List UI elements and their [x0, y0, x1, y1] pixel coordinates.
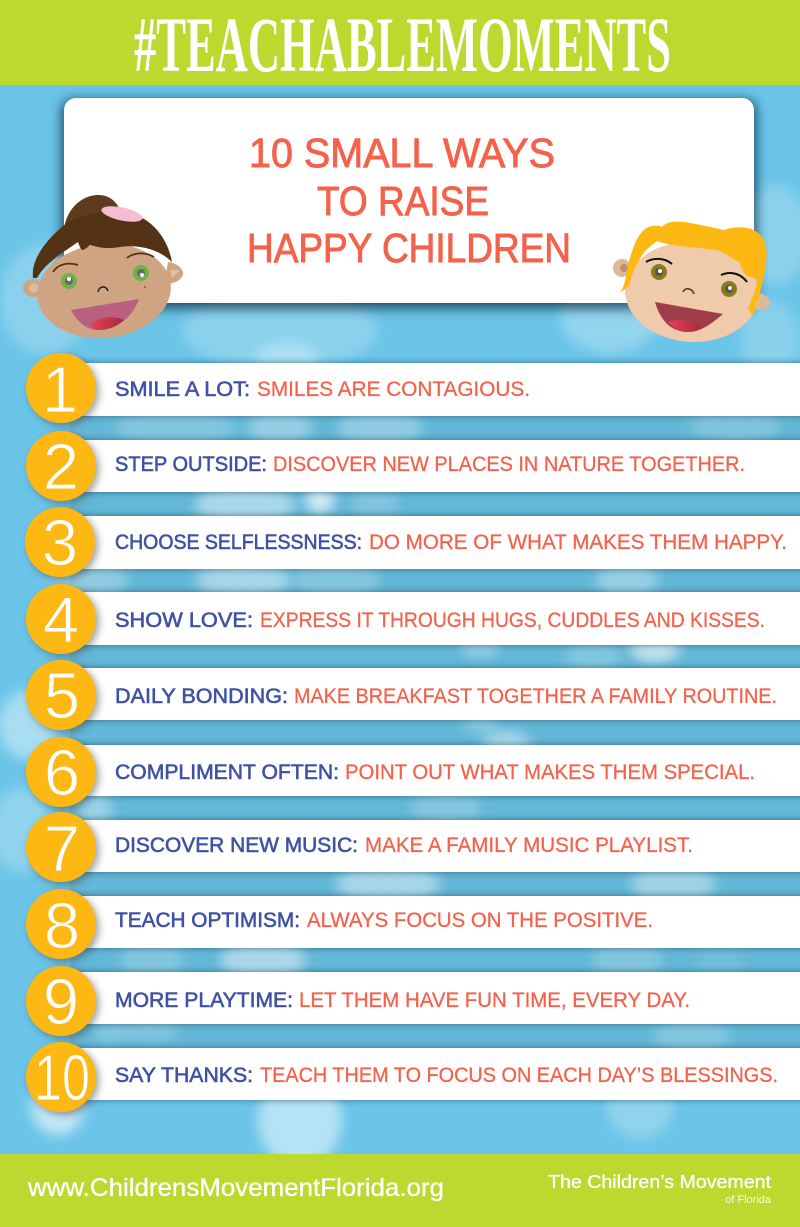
item 4: SHOW LOVE: — [115, 609, 253, 632]
website url: www.ChildrensMovementFlorida.org — [27, 1174, 444, 1202]
item 4: 4 — [43, 583, 79, 656]
icon: boy face — [613, 222, 770, 345]
item 6: 6 — [44, 736, 80, 809]
logo text: of Florida — [725, 1194, 772, 1206]
item 1: SMILES ARE CONTAGIOUS. — [257, 378, 530, 401]
heading: 10 small ways to raise happy children: 10 SMALL WAYS — [249, 130, 555, 176]
item 10: 10 — [34, 1041, 90, 1114]
item 7 — [26, 812, 800, 885]
item 4: EXPRESS IT THROUGH HUGS, CUDDLES AND KISSES. — [260, 609, 765, 632]
item 3: CHOOSE SELFLESSNESS: — [115, 531, 362, 554]
heading: 10 small ways to raise happy children: TO RAISE — [317, 178, 489, 224]
item 9 — [26, 965, 800, 1039]
item 7: 7 — [44, 812, 80, 885]
item 7: DISCOVER NEW MUSIC: — [115, 834, 358, 857]
item 5: 5 — [44, 659, 80, 732]
item 5: DAILY BONDING: — [115, 685, 288, 708]
icon: girl face — [23, 195, 183, 345]
heading: 10 small ways to raise happy children — [247, 130, 571, 271]
item 7: MAKE A FAMILY MUSIC PLAYLIST. — [365, 834, 693, 857]
item 4 — [26, 583, 800, 657]
item 6: POINT OUT WHAT MAKES THEM SPECIAL. — [345, 761, 755, 784]
header band — [0, 0, 800, 88]
logo text — [548, 1172, 772, 1206]
item 2: 2 — [43, 430, 79, 503]
item 10 — [26, 1041, 800, 1115]
list: ten tips — [25, 353, 800, 1115]
panel: title card — [62, 98, 756, 308]
item 1: 1 — [42, 353, 78, 426]
item 2: DISCOVER NEW PLACES IN NATURE TOGETHER. — [273, 453, 745, 476]
item 9: 9 — [43, 965, 79, 1038]
item 8 — [26, 889, 800, 962]
item 9: MORE PLAYTIME: — [115, 989, 293, 1012]
item 2: STEP OUTSIDE: — [115, 453, 267, 476]
item 3: 3 — [42, 506, 78, 579]
footer band — [0, 1154, 800, 1227]
item 3: DO MORE OF WHAT MAKES THEM HAPPY. — [369, 531, 787, 554]
item 6 — [26, 736, 800, 810]
item 8: 8 — [44, 889, 80, 962]
logo text: The Children’s Movement — [548, 1172, 771, 1192]
item 5 — [26, 659, 800, 733]
heading: 10 small ways to raise happy children: HAPPY CHILDREN — [247, 225, 571, 271]
item 9: LET THEM HAVE FUN TIME, EVERY DAY. — [299, 989, 690, 1012]
item 10: TEACH THEM TO FOCUS ON EACH DAY’S BLESSINGS. — [260, 1064, 778, 1087]
item 8: ALWAYS FOCUS ON THE POSITIVE. — [307, 909, 653, 932]
item 3 — [25, 506, 800, 580]
item 2 — [26, 430, 800, 504]
item 1: SMILE A LOT: — [115, 378, 250, 401]
item 6: COMPLIMENT OFTEN: — [115, 761, 339, 784]
item 5: MAKE BREAKFAST TOGETHER A FAMILY ROUTINE. — [294, 685, 777, 708]
item 1 — [26, 353, 800, 426]
item 10: SAY THANKS: — [115, 1064, 253, 1087]
item 8: TEACH OPTIMISM: — [115, 909, 300, 932]
